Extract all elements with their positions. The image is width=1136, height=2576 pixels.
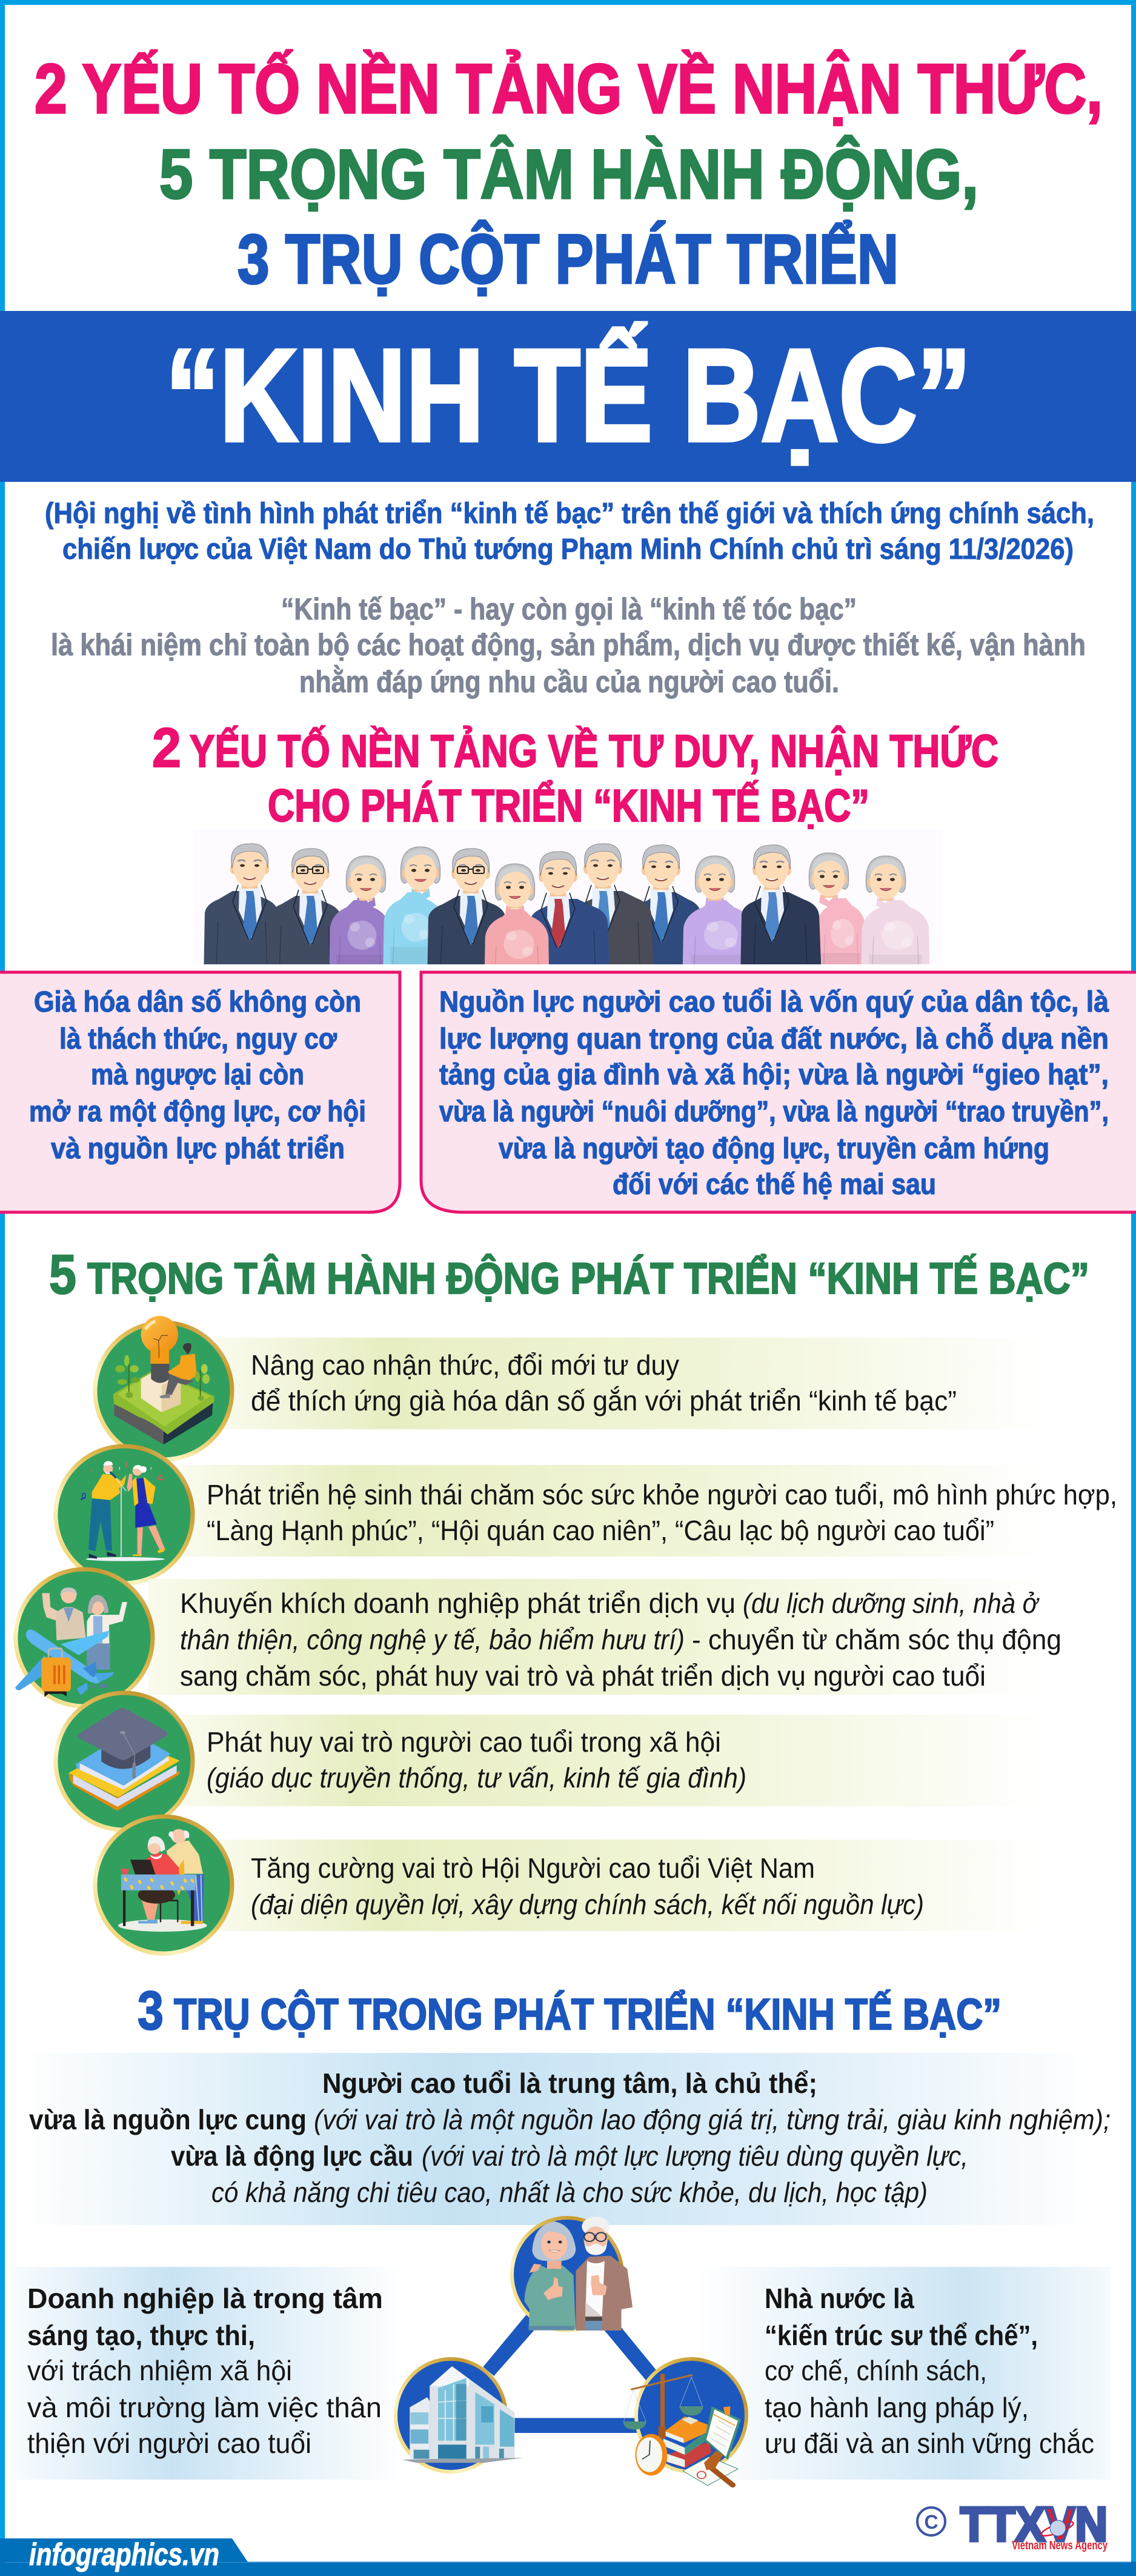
icon: scales, books and gavel <box>623 2359 746 2486</box>
text: row 1: Nâng cao nhận thức, đổi mới tư duy <box>251 1349 679 1381</box>
text: row 4: Phát huy vai trò người cao tuổi trong xã hội <box>207 1726 721 1758</box>
panel: population aging: và nguồn lực phát triển <box>51 1133 345 1165</box>
icon: elderly couple singing <box>56 1446 193 1583</box>
panel: state <box>696 2267 1111 2480</box>
icon: elderly couple thumbs up <box>512 2217 633 2331</box>
text: row 5: (đại diện quyền lợi, xây dựng chính sách, kết nối nguồn lực) <box>251 1889 924 1920</box>
text: row 3: sang chăm sóc, phát huy vai trò và phát triển dịch vụ người cao tuổi <box>180 1660 986 1692</box>
footer tab <box>0 2538 248 2562</box>
icon: couple with laptop <box>95 1817 232 1954</box>
triangle diagram <box>396 2217 746 2486</box>
heading: 3 trụ cột <box>138 1981 1001 2041</box>
icon: light bulb on island <box>95 1316 232 1460</box>
title: 3 TRỤ CỘT PHÁT TRIỂN <box>237 221 899 298</box>
panel: elderly as center: có khả năng chi tiêu cao, nhất là cho sức khỏe, du lịch, học tập) <box>211 2177 928 2208</box>
panel: population aging: là thách thức, nguy cơ <box>59 1023 337 1055</box>
panel: elderly as center: vừa là động lực cầu <box>171 2140 413 2172</box>
text: row 3: - chuyển từ chăm sóc thụ động <box>692 1624 1061 1655</box>
text: row 5 <box>251 1852 924 1920</box>
panel: businesses: thiện với người cao tuổi <box>27 2428 311 2459</box>
panel: population aging <box>0 972 400 1212</box>
panel: population aging: Già hóa dân số không còn <box>34 986 361 1018</box>
text: row 3: (du lịch dưỡng sinh, nhà ở <box>743 1587 1040 1619</box>
heading: 2 yếu tố <box>152 717 998 831</box>
heading: 2 yếu tố: CHO PHÁT TRIỂN “KINH TẾ BẠC” <box>268 780 869 831</box>
panel: elderly as center: (với vai trò là một lực lượng tiêu dùng quyền lực, <box>422 2140 968 2172</box>
panel: elderly resources: đối với các thế hệ mai sau <box>613 1169 936 1201</box>
panel: elderly resources: vừa là người tạo động lực, truyền cảm hứng <box>499 1133 1049 1165</box>
panel: elderly resources <box>421 972 1136 1212</box>
text: row 5: Tăng cường vai trò Hội Người cao tuổi Việt Nam <box>251 1852 815 1884</box>
text: row 3: Khuyến khích doanh nghiệp phát triển dịch vụ <box>180 1587 736 1619</box>
row 4: elderly role <box>56 1693 1051 1830</box>
icon: travel with plane and suitcase <box>15 1569 153 1706</box>
icon: graduation cap on books <box>56 1693 193 1830</box>
panel: elderly as center: Người cao tuổi là trung tâm, là chủ thể; <box>322 2067 817 2099</box>
text: row 4 <box>207 1726 746 1794</box>
panel: businesses <box>15 2267 406 2480</box>
panel: businesses: với trách nhiệm xã hội <box>27 2355 292 2386</box>
definition text: “Kinh tế bạc” - hay còn gọi là “kinh tế tóc bạc” <box>281 592 857 626</box>
triangle connectors <box>483 2311 656 2433</box>
panel: elderly as center: vừa là nguồn lực cung <box>29 2104 307 2135</box>
title <box>35 50 1103 298</box>
panel: businesses: sáng tạo, thực thi, <box>27 2320 255 2351</box>
heading: 5 trọng tâm: 5 <box>49 1244 76 1306</box>
heading: 3 trụ cột: TRỤ CỘT TRONG PHÁT TRIỂN “KINH TẾ BẠC” <box>174 1990 1001 2039</box>
heading: 2 yếu tố: YẾU TỐ NỀN TẢNG VỀ TƯ DUY, NHẬN THỨC <box>190 726 998 776</box>
definition text <box>51 592 1086 699</box>
heading: 3 trụ cột: 3 <box>138 1981 164 2041</box>
heading: 2 yếu tố: 2 <box>152 717 181 779</box>
text: row 3: thân thiện, công nghệ y tế, bảo hiểm hưu trí) <box>180 1624 685 1655</box>
row 2: health ecosystem <box>56 1446 1117 1583</box>
row 1: awareness <box>95 1316 1051 1460</box>
subtitle: conference note <box>45 498 1094 566</box>
panel: businesses: và môi trường làm việc thân <box>27 2392 382 2423</box>
illustration: group of elderly people <box>204 829 929 964</box>
footer band <box>0 2537 1136 2576</box>
panel: businesses: Doanh nghiệp là trọng tâm <box>27 2283 383 2314</box>
title band: kinh tế bạc: “KINH TẾ BẠC” <box>165 322 971 469</box>
panel: elderly resources: lực lượng quan trọng của đất nước, là chỗ dựa nền <box>439 1023 1109 1055</box>
text: row 1 <box>251 1349 957 1416</box>
panel: population aging: mở ra một động lực, cơ hội <box>29 1096 366 1128</box>
logo: TTXVN: TTXVN <box>960 2497 1108 2551</box>
panel: population aging: mà ngược lại còn <box>91 1059 304 1091</box>
text: row 2: “Làng Hạnh phúc”, “Hội quán cao niên”, “Câu lạc bộ người cao tuổi” <box>207 1515 994 1546</box>
text: row 1: để thích ứng già hóa dân số gắn với phát triển “kinh tế bạc” <box>251 1385 957 1416</box>
icon: office building <box>396 2359 523 2472</box>
text: row 2 <box>207 1479 1117 1546</box>
panel: state: “kiến trúc sư thể chế”, <box>765 2320 1038 2351</box>
panel: state: ưu đãi và an sinh vững chắc <box>765 2428 1094 2459</box>
panel: elderly as center <box>18 2053 1111 2225</box>
panel: state: cơ chế, chính sách, <box>765 2355 987 2386</box>
source label: infographics.vn <box>29 2537 219 2572</box>
text: row 4: (giáo dục truyền thống, tư vấn, kinh tế gia đình) <box>207 1762 746 1794</box>
title: 5 TRỌNG TÂM HÀNH ĐỘNG, <box>159 136 978 213</box>
panel: state: tạo hành lang pháp lý, <box>765 2392 1029 2423</box>
logo: TTXVN: C <box>924 2511 938 2533</box>
row 3: business services <box>15 1569 1061 1706</box>
definition text: nhằm đáp ứng nhu cầu của người cao tuổi. <box>299 665 839 699</box>
panel: state: Nhà nước là <box>765 2283 914 2314</box>
text: row 3 <box>180 1587 1061 1692</box>
row 5: association <box>95 1817 1051 1954</box>
